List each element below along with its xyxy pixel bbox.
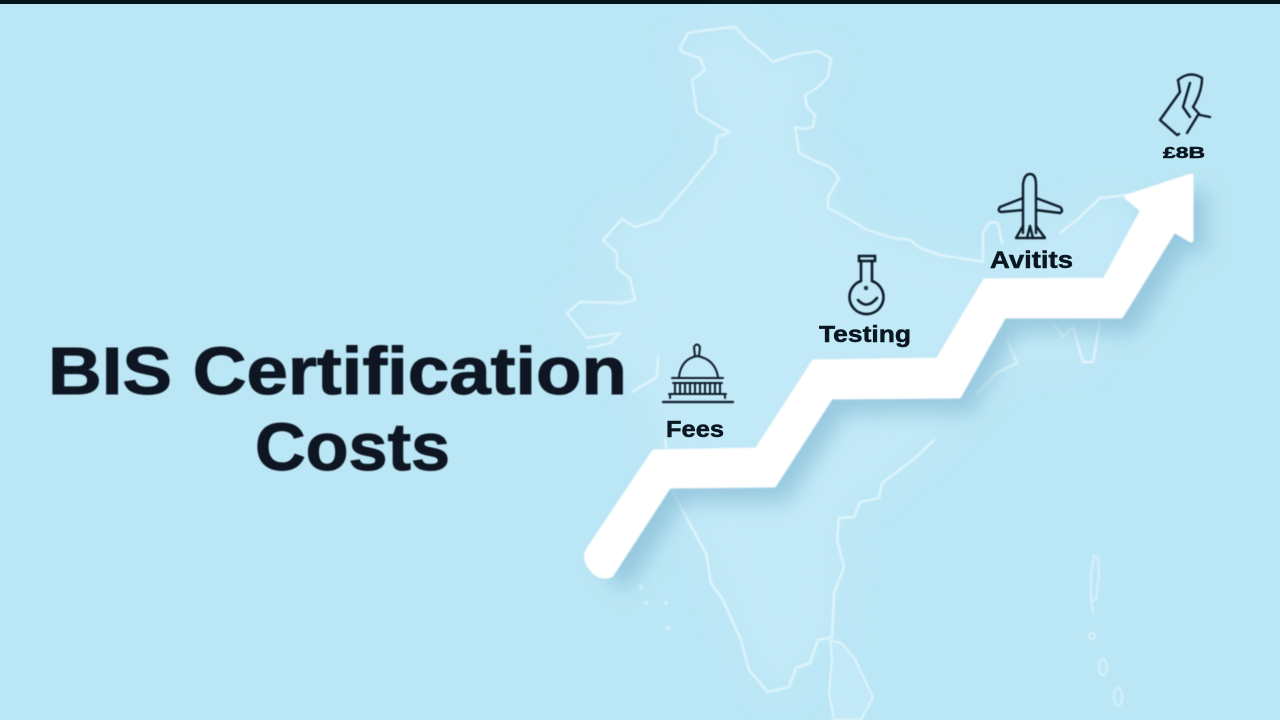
title: Costs [255,410,450,485]
arrow shadow [600,188,1206,592]
label: top step: £8B [1163,145,1205,162]
map: Lakshadweep dots [638,584,670,630]
icon: hand-drawn figure [1160,74,1210,135]
arrow body [587,176,1191,576]
top black bar [0,0,1280,4]
icon: airplane [999,174,1062,238]
title [48,334,627,485]
label: Testing: Testing [819,321,911,347]
rising arrow [587,176,1206,592]
icon: government dome [663,344,733,402]
label: Avitits: Avitits [990,247,1073,274]
map outline: Sri Lanka [829,640,873,720]
map outline: mainland [567,27,1140,692]
icon: flask [849,256,884,314]
label: Fees: Fees [666,416,724,442]
map land tint [568,27,1140,692]
map of India [567,27,1140,720]
title: BIS Certification [48,334,627,409]
map outline: islands [1089,556,1122,706]
